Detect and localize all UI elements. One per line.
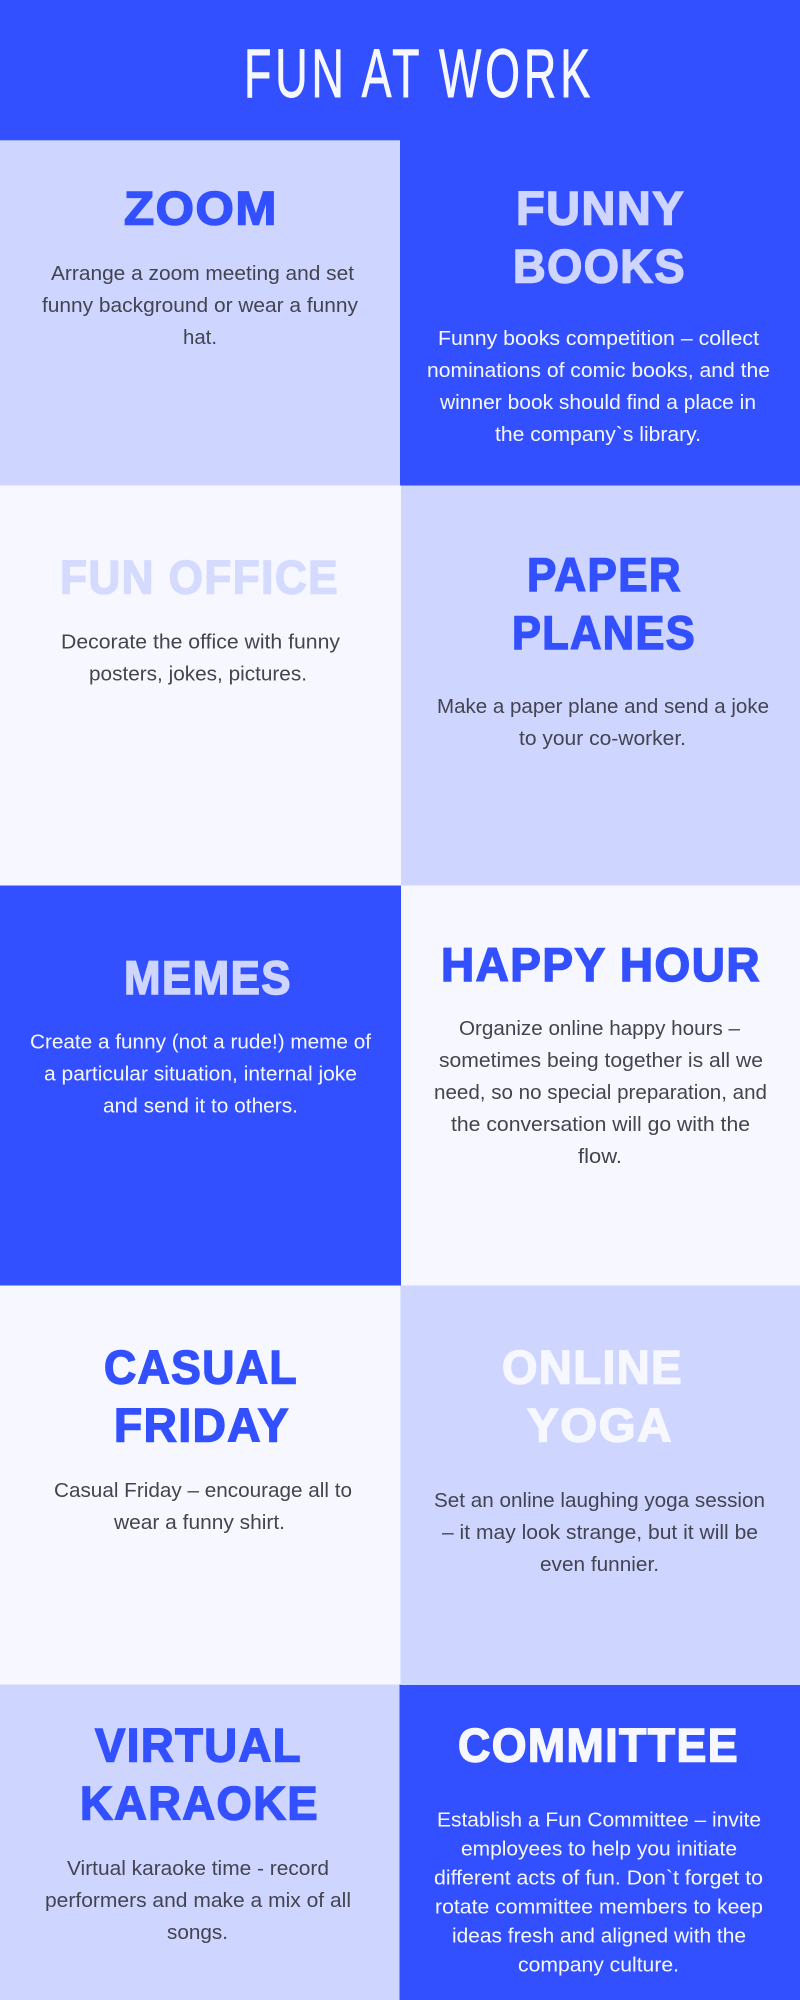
text: happy hour description: flow. <box>578 1145 622 1168</box>
text: fun office description: posters, jokes, pictures. <box>89 663 307 686</box>
text: happy hour description: the conversation will go with the <box>451 1113 750 1136</box>
text: zoom description: Arrange a zoom meeting and set <box>51 262 354 285</box>
text: memes description: and send it to others. <box>103 1095 298 1118</box>
text: memes description: a particular situation, internal joke <box>44 1063 357 1086</box>
text: paper planes description: Make a paper plane and send a joke <box>437 695 769 718</box>
text: virtual karaoke description: songs. <box>167 1921 228 1944</box>
text: funny books description: nominations of comic books, and the <box>427 359 770 382</box>
text: committee description: Establish a Fun Committee – invite <box>437 1809 761 1832</box>
text: happy hour description: sometimes being together is all we <box>439 1049 763 1072</box>
heading: online yoga: ONLINE <box>502 1340 683 1394</box>
heading: funny books <box>513 182 686 292</box>
text: committee description: company culture. <box>518 1954 679 1977</box>
panel: paper planes <box>401 486 800 886</box>
text: fun office description: Decorate the office with funny <box>61 631 341 654</box>
heading: paper planes: PLANES <box>512 606 696 659</box>
panel: zoom <box>0 140 400 486</box>
text: funny books description <box>427 327 770 446</box>
title: FUN AT WORK <box>244 35 594 112</box>
text: happy hour description: Organize online happy hours – <box>459 1017 741 1040</box>
heading: funny books: FUNNY <box>516 182 685 234</box>
text: virtual karaoke description: performers and make a mix of all <box>45 1889 351 1912</box>
text: online yoga description: – it may look strange, but it will be <box>442 1521 758 1544</box>
text: paper planes description: to your co-worker. <box>519 727 686 750</box>
header band <box>0 0 800 141</box>
heading: zoom: ZOOM <box>124 182 278 234</box>
text: zoom description: funny background or wear a funny <box>42 294 359 317</box>
text: zoom description: hat. <box>183 326 217 349</box>
heading: virtual karaoke: KARAOKE <box>80 1776 319 1830</box>
heading: memes: MEMES <box>124 951 292 1004</box>
text: funny books description: winner book should find a place in <box>439 391 756 414</box>
text: online yoga description: even funnier. <box>540 1553 659 1576</box>
text: committee description: rotate committee members to keep <box>435 1896 763 1919</box>
text: casual friday description: Casual Friday – encourage all to <box>54 1479 352 1502</box>
heading: casual friday: CASUAL <box>104 1340 298 1394</box>
text: funny books description: the company`s library. <box>495 423 701 446</box>
heading: fun office: FUN OFFICE <box>60 550 339 604</box>
heading: online yoga <box>502 1340 683 1452</box>
heading: happy hour: HAPPY HOUR <box>441 938 761 991</box>
panel: casual friday <box>0 1286 400 1684</box>
heading: virtual karaoke <box>80 1718 319 1830</box>
text: funny books description: Funny books competition – collect <box>438 327 759 350</box>
text: online yoga description <box>434 1489 765 1576</box>
text: happy hour description: need, so no special preparation, and <box>434 1081 767 1104</box>
text: virtual karaoke description: Virtual karaoke time - record <box>67 1857 329 1880</box>
text: committee description: ideas fresh and aligned with the <box>452 1925 746 1948</box>
panel: funny books <box>400 140 800 486</box>
text: paper planes description <box>437 695 769 750</box>
text: virtual karaoke description <box>45 1857 351 1944</box>
heading: online yoga: YOGA <box>527 1398 673 1452</box>
panel: online yoga <box>400 1286 800 1685</box>
text: committee description: different acts of fun. Don`t forget to <box>434 1867 763 1890</box>
text: zoom description <box>42 262 359 349</box>
text: fun office description <box>61 631 341 686</box>
heading: committee: COMMITTEE <box>458 1718 739 1772</box>
panel: happy hour <box>401 886 800 1286</box>
text: committee description <box>434 1809 763 1977</box>
heading: virtual karaoke: VIRTUAL <box>95 1718 302 1772</box>
heading: casual friday: FRIDAY <box>114 1398 290 1452</box>
panel: fun office <box>0 486 401 886</box>
text: memes description: Create a funny (not a rude!) meme of <box>30 1031 371 1054</box>
text: casual friday description <box>54 1479 352 1534</box>
heading: paper planes: PAPER <box>527 548 682 601</box>
heading: paper planes <box>512 548 696 659</box>
text: memes description <box>30 1031 371 1118</box>
heading: casual friday <box>104 1340 298 1452</box>
text: online yoga description: Set an online laughing yoga session <box>434 1489 765 1512</box>
panel: virtual karaoke <box>0 1684 400 2000</box>
panel: memes <box>0 886 401 1286</box>
heading: funny books: BOOKS <box>513 240 686 292</box>
text: happy hour description <box>434 1017 767 1168</box>
text: casual friday description: wear a funny shirt. <box>113 1511 285 1534</box>
text: committee description: employees to help you initiate <box>461 1838 737 1861</box>
panel: committee <box>400 1685 800 2000</box>
